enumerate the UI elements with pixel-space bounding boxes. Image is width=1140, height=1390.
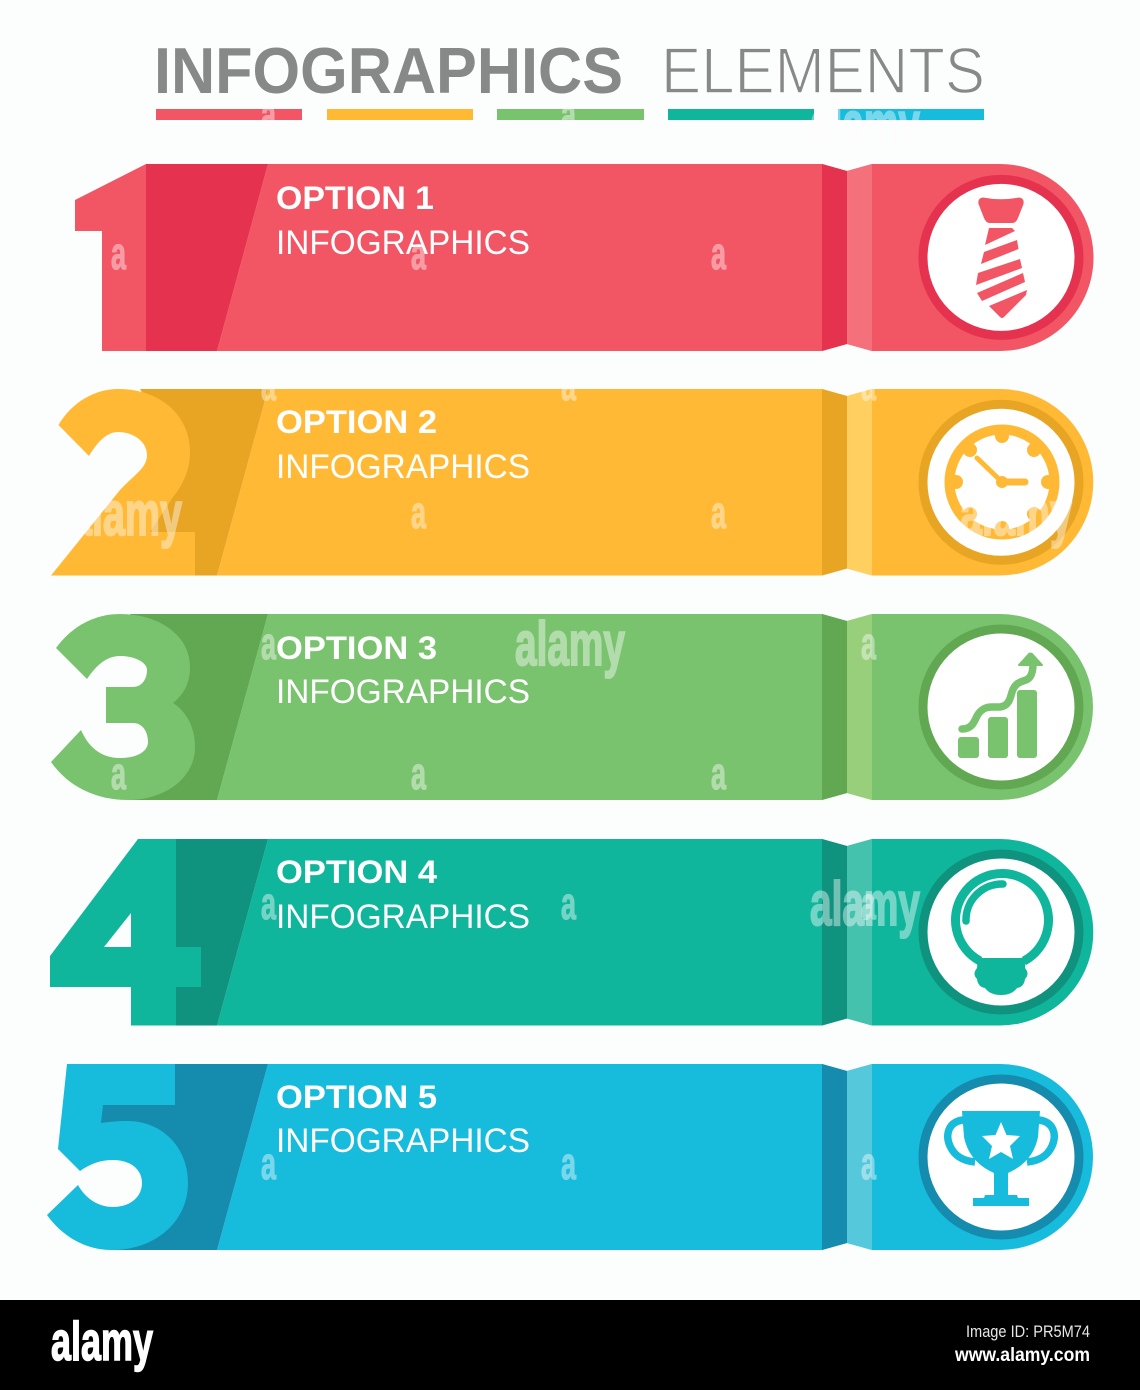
image id: Image ID: PR5M74 (966, 1322, 1090, 1341)
watermarks: alamy (810, 870, 920, 939)
watermarks: a (261, 89, 277, 140)
option 2 subtitle: INFOGRAPHICS (276, 448, 530, 486)
panel: option 3 (51, 614, 1093, 800)
icon: clock (923, 404, 1079, 560)
watermarks: a (411, 748, 427, 799)
footer bar (0, 1300, 1140, 1390)
watermarks: a (711, 487, 727, 538)
watermarks: a (261, 618, 277, 669)
watermarks: a (561, 878, 577, 929)
option 4 heading: OPTION 4 (276, 854, 437, 890)
icon: necktie (923, 179, 1079, 335)
website: www.alamy.com (954, 1345, 1090, 1366)
watermarks: a (411, 487, 427, 538)
watermarks: alamy (515, 610, 625, 679)
watermarks: alamy (810, 90, 920, 159)
watermarks: a (561, 359, 577, 410)
option 3 subtitle: INFOGRAPHICS (276, 673, 530, 711)
watermarks: a (861, 618, 877, 669)
watermarks: a (861, 878, 877, 929)
option 5 subtitle: INFOGRAPHICS (276, 1122, 530, 1160)
watermarks: a (711, 748, 727, 799)
panel: option 4 (50, 839, 1093, 1026)
panel: option 1 (75, 164, 1094, 351)
colour key bars (156, 109, 984, 120)
icon: trophy (923, 1079, 1079, 1235)
watermarks (70, 89, 1072, 1189)
watermarks: alamy (960, 480, 1072, 549)
watermarks: a (861, 359, 877, 410)
option 1 heading: OPTION 1 (276, 180, 434, 216)
watermarks: a (411, 228, 427, 279)
icon: growth chart (923, 629, 1079, 785)
numeral 1 (75, 164, 146, 351)
panel: option 5 (47, 1064, 1093, 1250)
watermarks: a (261, 878, 277, 929)
numeral 2 (51, 389, 195, 576)
title (154, 34, 985, 107)
watermarks: a (111, 228, 127, 279)
option 2 heading: OPTION 2 (276, 404, 437, 440)
numeral 5 (47, 1064, 188, 1250)
watermarks: a (561, 89, 577, 140)
watermarks: a (861, 1138, 877, 1189)
watermarks: a (261, 1138, 277, 1189)
watermarks: a (261, 359, 277, 410)
watermarks: alamy (70, 480, 182, 549)
option 1 subtitle: INFOGRAPHICS (276, 224, 530, 262)
watermarks: a (111, 748, 127, 799)
icon: light bulb (923, 854, 1079, 1010)
title: INFOGRAPHICS (154, 34, 623, 107)
numeral 4 (50, 839, 201, 1026)
title: ELEMENTS (661, 34, 985, 107)
footer logo: alamy (51, 1310, 153, 1372)
watermarks: a (711, 228, 727, 279)
option 5 heading: OPTION 5 (276, 1079, 437, 1115)
numeral 3 (51, 614, 195, 800)
option 4 subtitle: INFOGRAPHICS (276, 898, 530, 936)
option 3 heading: OPTION 3 (276, 630, 437, 666)
watermarks: a (561, 1138, 577, 1189)
panel: option 2 (51, 389, 1093, 576)
